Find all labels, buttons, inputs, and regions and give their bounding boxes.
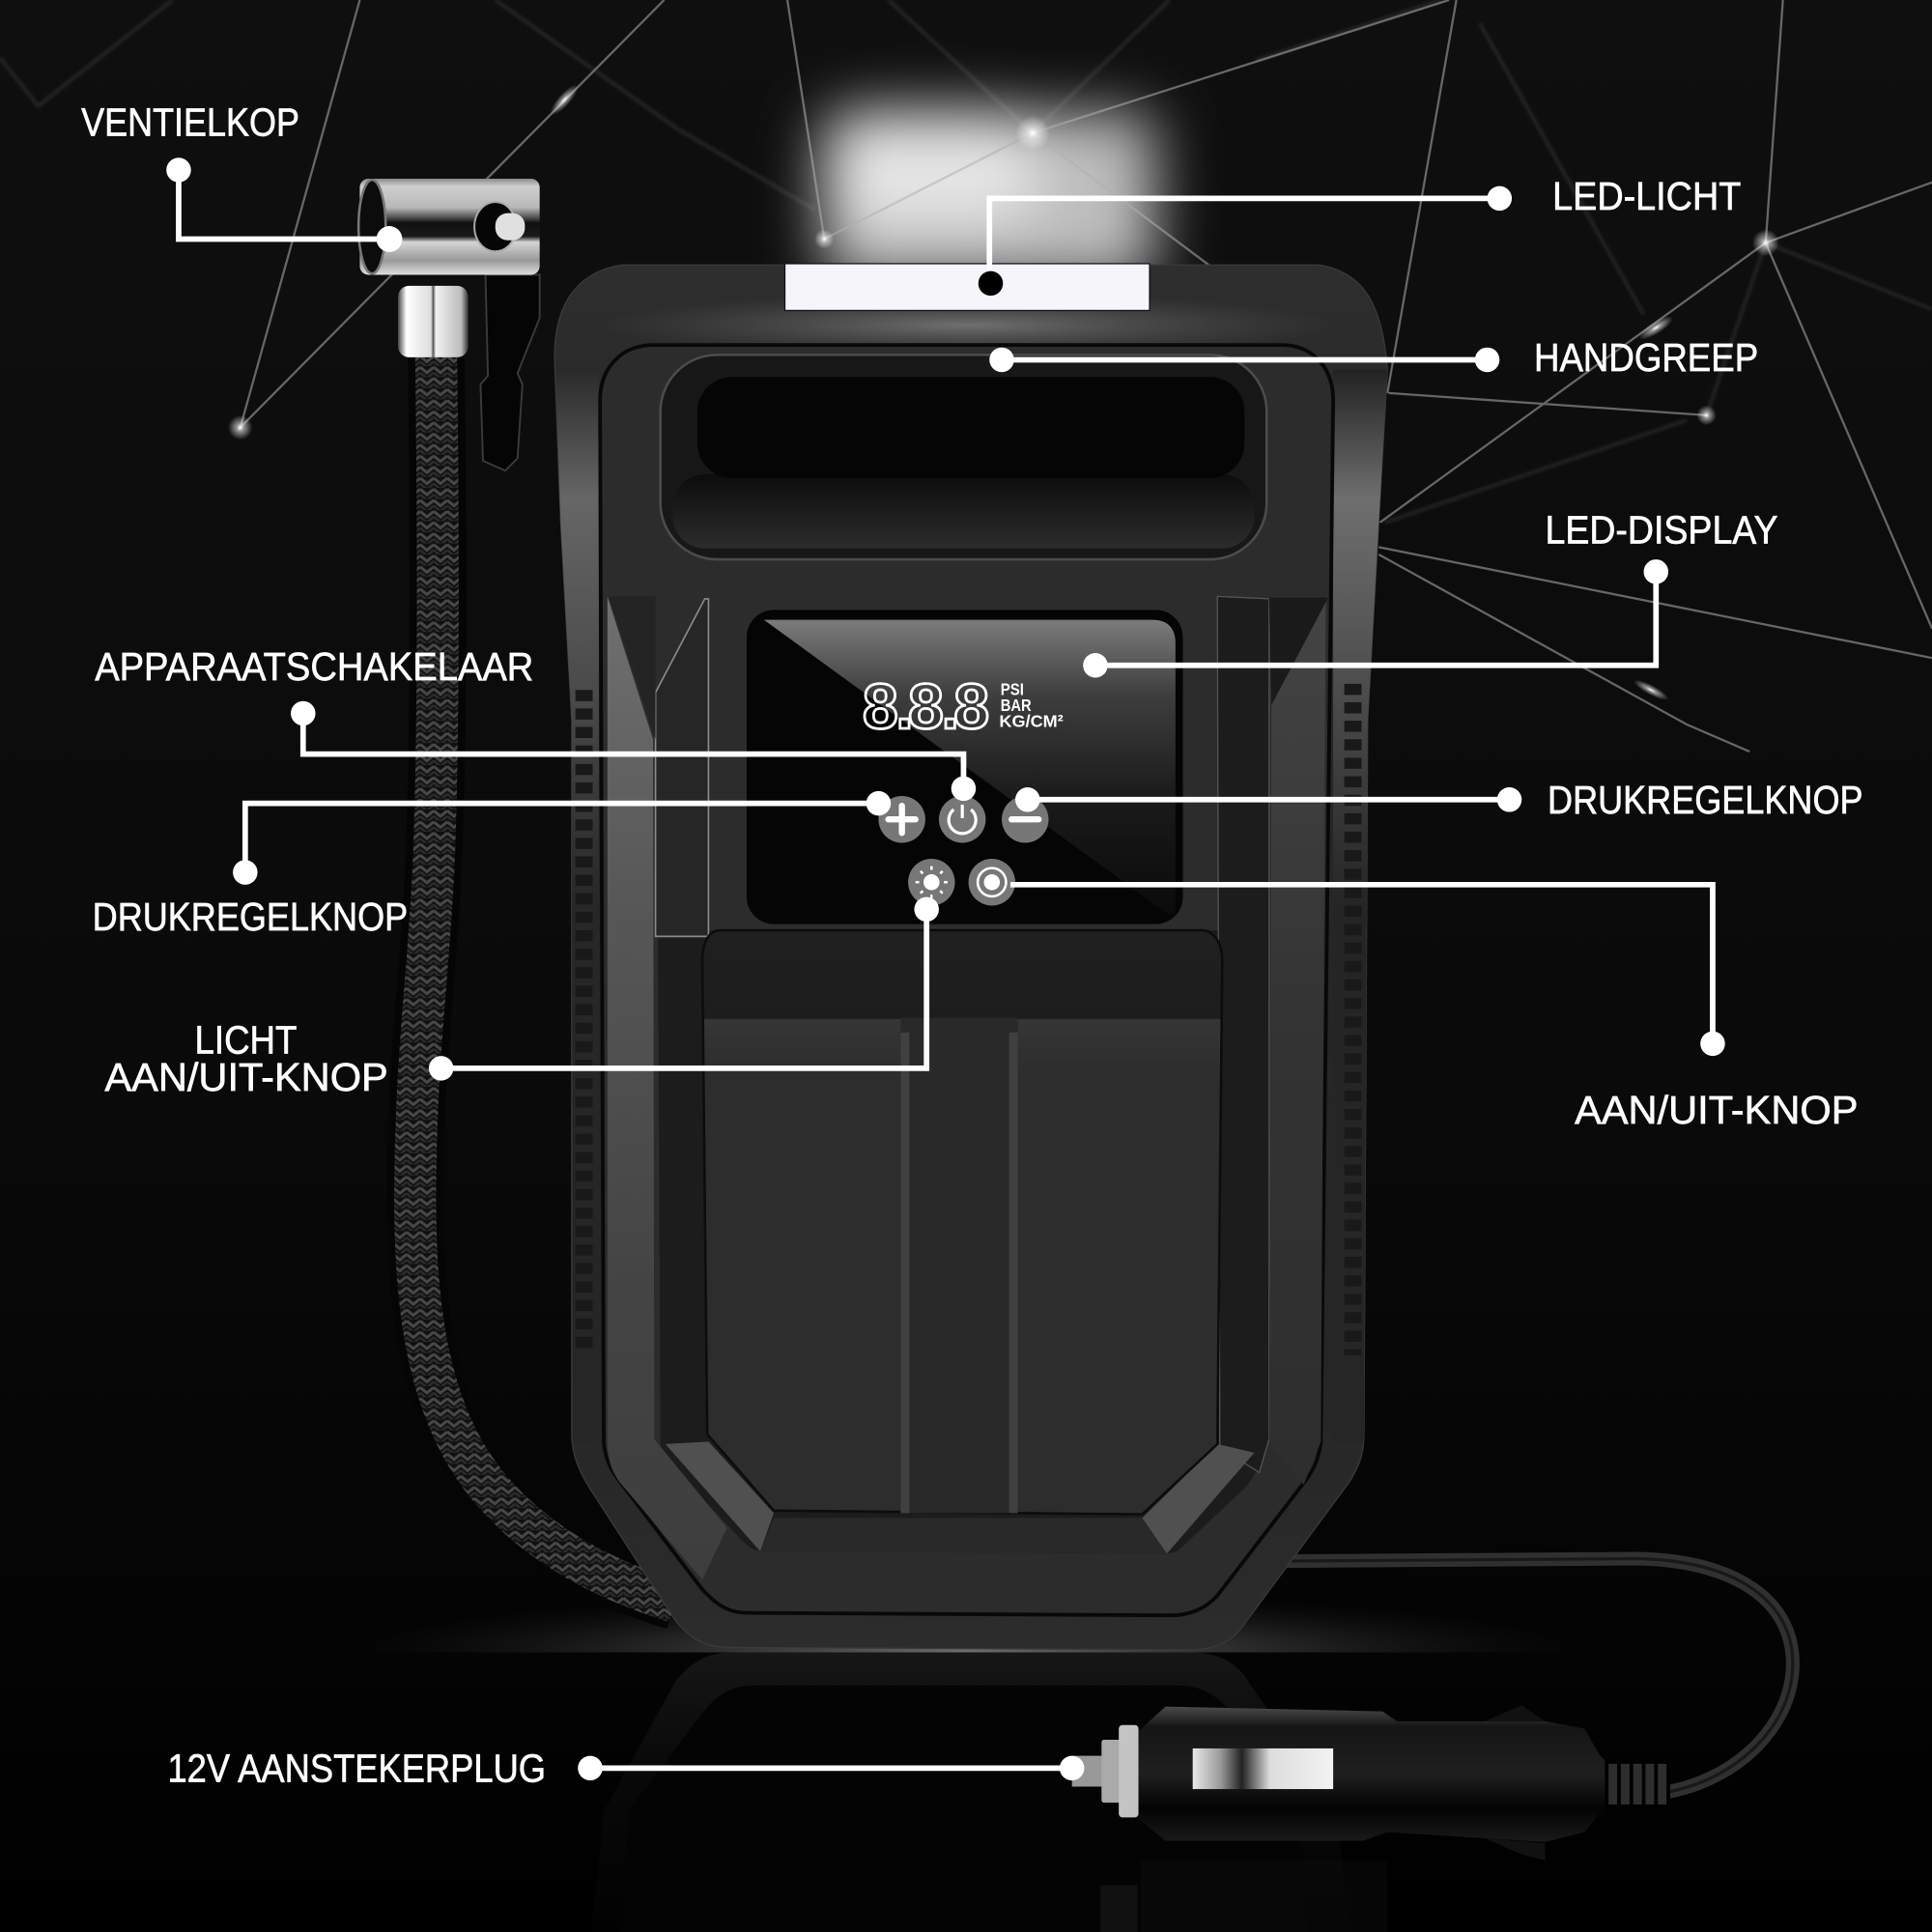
lower well	[658, 930, 1260, 1553]
display units: KG/CM²	[999, 712, 1064, 731]
plug fin	[1485, 1705, 1545, 1861]
plug clip	[1193, 1748, 1333, 1789]
label: pressure button left: DRUKREGELKNOP	[93, 895, 408, 939]
display reflection	[764, 620, 1176, 914]
inner frame	[600, 345, 1333, 1615]
right rim	[1333, 370, 1387, 1441]
label: device switch: APPARAATSCHAKELAAR	[95, 644, 533, 689]
label: light button: AAN/UIT-KNOP	[104, 1055, 388, 1099]
constellation stars	[228, 81, 1779, 703]
LED light beam glow	[823, 111, 1155, 283]
label: valve head: VENTIELKOP	[81, 99, 299, 144]
air hose	[415, 357, 675, 1602]
callout: valve head	[81, 99, 402, 252]
valve lever	[480, 274, 540, 470]
label: light button	[104, 1018, 388, 1099]
strain relief	[1606, 1762, 1668, 1806]
valve cylinder	[359, 179, 540, 274]
compressor reflection	[591, 1652, 1350, 1932]
chamfer highlights	[666, 1441, 1254, 1553]
label: light button: LICHT	[195, 1018, 297, 1063]
button: minus	[1002, 796, 1048, 842]
label: 12V plug: 12V AANSTEKERPLUG	[167, 1746, 546, 1790]
top light reflection	[598, 294, 1337, 357]
display units	[999, 679, 1064, 731]
12V plug	[1072, 1705, 1668, 1861]
right side panel	[1217, 596, 1328, 1485]
label: handle: HANDGREEP	[1534, 335, 1758, 380]
plug knurl	[1101, 1740, 1122, 1803]
label: on/off button: AAN/UIT-KNOP	[1575, 1088, 1858, 1132]
callout: LED display	[1083, 508, 1778, 678]
display panel	[747, 610, 1182, 924]
faint constellation lines	[0, 0, 1932, 523]
side grip ribs	[584, 684, 1353, 1355]
LED light bar	[784, 264, 1150, 310]
label: LED light: LED-LICHT	[1552, 174, 1741, 218]
button: plus	[878, 796, 925, 842]
valve pin hole	[474, 202, 516, 251]
valve neck	[398, 286, 469, 357]
left side panel	[608, 596, 727, 1579]
callout: pressure button left	[93, 791, 891, 939]
plug tip	[1072, 1756, 1104, 1786]
plug ring	[1119, 1725, 1139, 1817]
callout: 12V plug	[167, 1746, 1084, 1790]
valve pin	[496, 213, 525, 241]
display digits: 8.8.8	[863, 671, 989, 743]
button: light	[908, 859, 955, 906]
valve head	[358, 179, 540, 470]
valve opening	[358, 180, 385, 273]
handle opening	[661, 355, 1266, 559]
display units: PSI	[1001, 679, 1024, 698]
callout: light button	[104, 897, 939, 1099]
callout: on/off button	[1010, 885, 1858, 1132]
display units: BAR	[1001, 696, 1032, 715]
callout: pressure button right	[1015, 778, 1863, 822]
button: on/off	[969, 859, 1015, 906]
power cable	[1282, 1559, 1793, 1793]
callout: device switch	[95, 644, 976, 801]
floor shine	[464, 1613, 1469, 1652]
lower recessed panel	[702, 930, 1222, 1515]
callout: LED light	[979, 174, 1741, 296]
label: LED display: LED-DISPLAY	[1545, 508, 1778, 553]
compressor body	[554, 265, 1387, 1650]
plug body	[1139, 1707, 1606, 1842]
12V plug reflection	[1100, 1861, 1387, 1932]
callout: handle	[989, 335, 1758, 380]
constellation lines	[241, 0, 1932, 752]
label: pressure button right: DRUKREGELKNOP	[1548, 778, 1863, 822]
left rim	[555, 370, 599, 1441]
button: power	[939, 796, 985, 842]
